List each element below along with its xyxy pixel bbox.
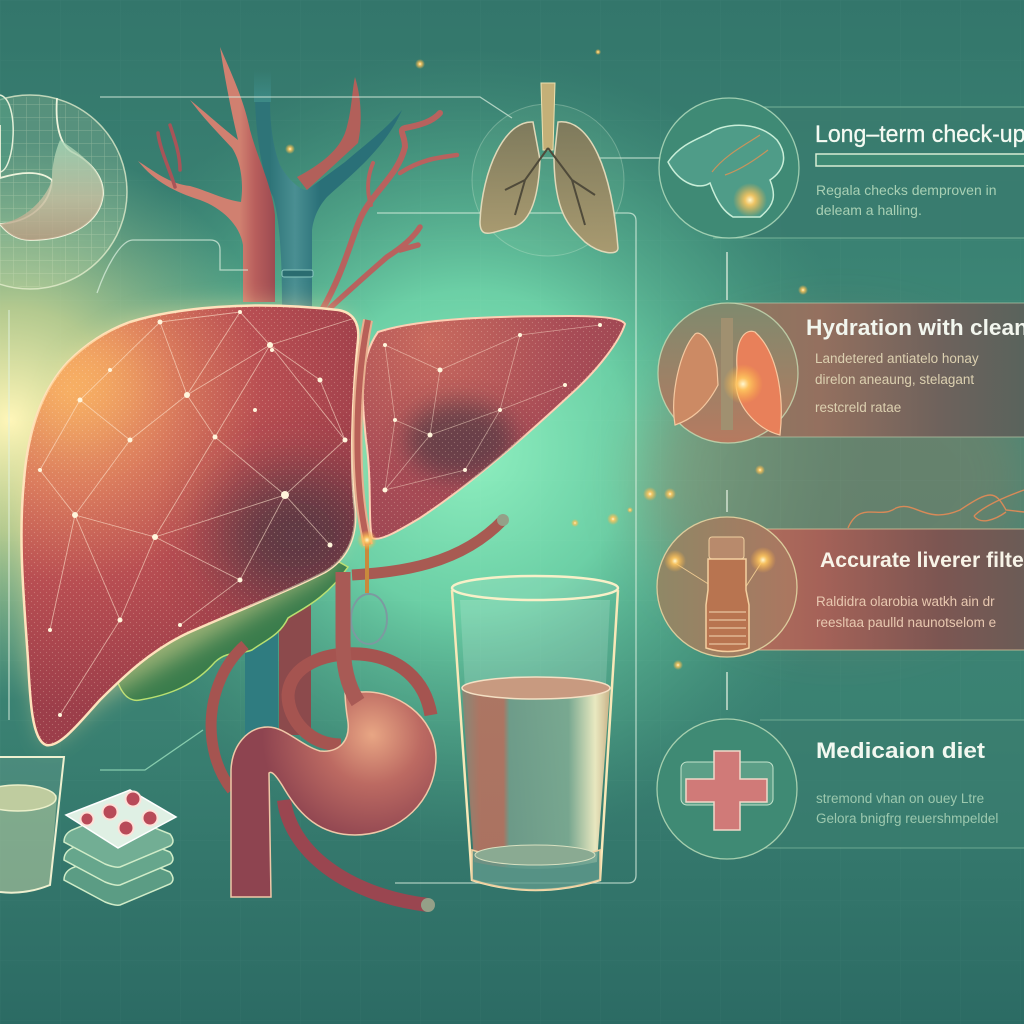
- heading: Hydration with clean: [806, 315, 1024, 340]
- panel: accurate liver filter: [657, 517, 1024, 657]
- vein fade: [254, 70, 271, 102]
- chart squiggle above panel: [848, 490, 1024, 528]
- lower intestine tube: [284, 800, 428, 905]
- floating glow particles: [285, 49, 808, 670]
- panel: medication diet: [657, 719, 1024, 859]
- central vein lower: [245, 600, 278, 747]
- water glass: [452, 576, 618, 890]
- frame connector lines: [9, 97, 660, 883]
- branch end cap: [497, 514, 509, 526]
- panel: hydration with clean: [658, 303, 1024, 443]
- body text: [816, 594, 996, 630]
- liver glow: [24, 306, 358, 745]
- body text: Landetered antiatelo honay: [815, 351, 979, 366]
- bile duct and ring: [351, 320, 387, 644]
- body text: Regala checks demproven in: [816, 182, 997, 198]
- liver left lobe: [20, 304, 360, 746]
- body text: Raldidra olarobia watkh ain dr: [816, 594, 995, 609]
- right red branch: [297, 77, 361, 190]
- body text: direlon aneaung, stelagant: [815, 372, 974, 387]
- lower vessels behind liver: [245, 590, 311, 747]
- hepatic artery loop left: [211, 645, 245, 790]
- left lobe mesh: [40, 312, 355, 715]
- icon: translucent liver: [668, 125, 784, 217]
- lungs illustration: [472, 83, 624, 256]
- left lobe nodes: [38, 310, 348, 717]
- icon: glowing lungs: [674, 318, 781, 435]
- pill blister stack: [64, 790, 176, 905]
- liver right lobe: [362, 315, 626, 540]
- right lobe nodes: [382, 323, 602, 492]
- right branch from liver: [352, 520, 503, 575]
- heading: Medicaion diet: [816, 738, 986, 763]
- body text: Gelora bnigfrg reuershmpeldel: [816, 811, 998, 826]
- body text: [815, 351, 979, 415]
- left twigs: [158, 125, 180, 187]
- central vein: [255, 100, 402, 307]
- small glass bottom-left: [0, 757, 64, 893]
- body text: deleam a halling.: [816, 202, 922, 218]
- deep vessel lower: [279, 590, 311, 735]
- progress bar: [816, 154, 1024, 166]
- stomach top tube arc: [288, 654, 431, 745]
- panel connector lines: [726, 252, 728, 710]
- body text: reesltaa paulld naunotselom e: [816, 615, 996, 630]
- tube end cap: [421, 898, 435, 912]
- icon: red cross: [681, 751, 773, 830]
- stomach: [231, 690, 436, 897]
- red trunk: [138, 47, 275, 302]
- pills: [80, 792, 158, 836]
- icon: bottle: [664, 537, 776, 652]
- body text: restcreld ratae: [815, 400, 901, 415]
- lower vessels behind stomach: [211, 514, 509, 912]
- gallbladder: [117, 540, 348, 700]
- heading: Accurate liverer filter: [820, 549, 1024, 572]
- body text: [816, 791, 998, 826]
- right twigs: [322, 113, 457, 310]
- esophagus tube: [343, 572, 358, 702]
- body text: stremond vhan on ouey Ltre: [816, 791, 984, 806]
- branching blood vessels: [138, 47, 457, 310]
- vein cuff: [282, 270, 313, 277]
- panel: long-term check-ups: [659, 98, 1024, 238]
- right lobe mesh: [385, 325, 600, 490]
- body text: [816, 182, 997, 218]
- top-left circular organ inset: [0, 95, 127, 289]
